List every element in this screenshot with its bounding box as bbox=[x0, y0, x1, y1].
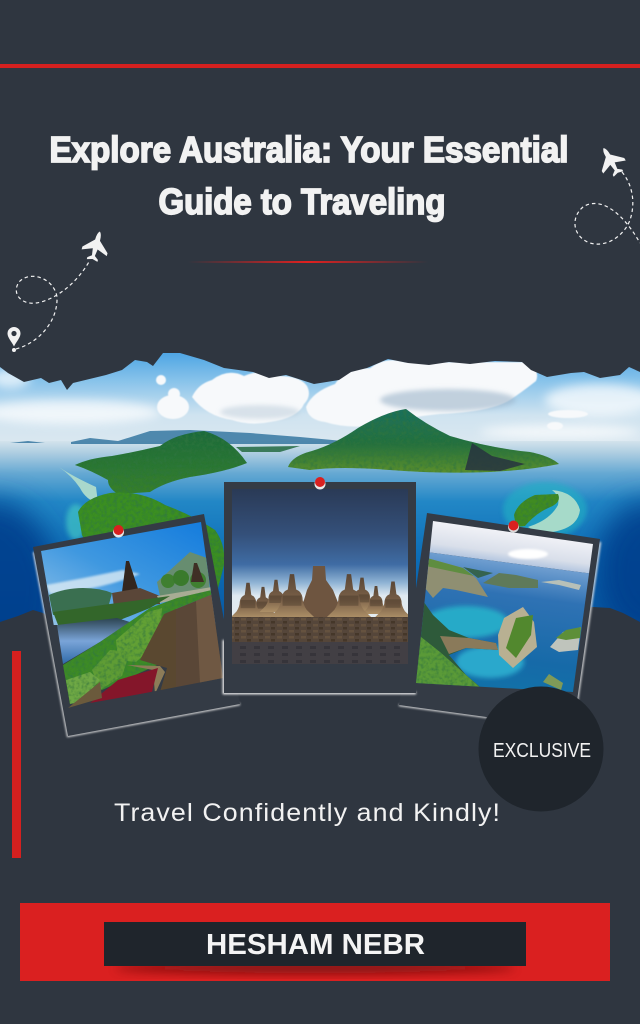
title: Explore Australia: Your Essential bbox=[50, 129, 568, 170]
pin: left card bbox=[113, 525, 124, 538]
coast photo bbox=[416, 521, 593, 692]
wispy haze bbox=[0, 368, 640, 439]
author banner bbox=[20, 903, 610, 981]
card glow bbox=[399, 542, 600, 729]
tagline: Travel Confidently and Kindly! bbox=[114, 799, 501, 827]
red gradient rule bbox=[188, 261, 428, 263]
title bbox=[50, 129, 568, 222]
lava flow bbox=[465, 443, 525, 471]
badge: exclusive: EXCLUSIVE bbox=[493, 740, 591, 762]
sky bbox=[0, 353, 640, 441]
deep water corners bbox=[0, 484, 640, 622]
card glow bbox=[224, 640, 416, 693]
volcano island bbox=[288, 409, 559, 473]
right photo card bbox=[398, 513, 602, 720]
pin: centre card bbox=[314, 477, 326, 490]
left island bbox=[75, 431, 247, 494]
left photo card bbox=[30, 514, 240, 736]
icon: right flight path with plane bbox=[575, 142, 640, 244]
distant mountains bbox=[10, 430, 343, 444]
temple stupas photo bbox=[230, 489, 412, 664]
icon: left flight path with plane and location pin bbox=[8, 228, 112, 352]
sand spit bbox=[60, 468, 98, 500]
distant islet bbox=[236, 446, 300, 452]
top red line bbox=[0, 64, 640, 68]
sea bbox=[0, 441, 640, 630]
lower left island bbox=[78, 492, 224, 588]
card glow bbox=[34, 552, 240, 736]
torn paper edge bottom bbox=[0, 607, 640, 640]
temple photo bbox=[41, 522, 223, 708]
hedge greenery bbox=[63, 590, 213, 704]
centre photo card bbox=[224, 482, 416, 693]
author name: HESHAM NEBR bbox=[206, 929, 425, 961]
clouds bbox=[156, 360, 588, 430]
pin: right card bbox=[508, 520, 519, 532]
torn paper edge top bbox=[0, 345, 640, 390]
red vertical bar bbox=[12, 651, 21, 858]
reef islet bbox=[503, 482, 587, 538]
title: Guide to Traveling bbox=[158, 181, 446, 222]
cloud shadows bbox=[220, 389, 516, 419]
badge: exclusive bbox=[478, 686, 604, 812]
hero photo: tropical islands bbox=[0, 353, 640, 622]
